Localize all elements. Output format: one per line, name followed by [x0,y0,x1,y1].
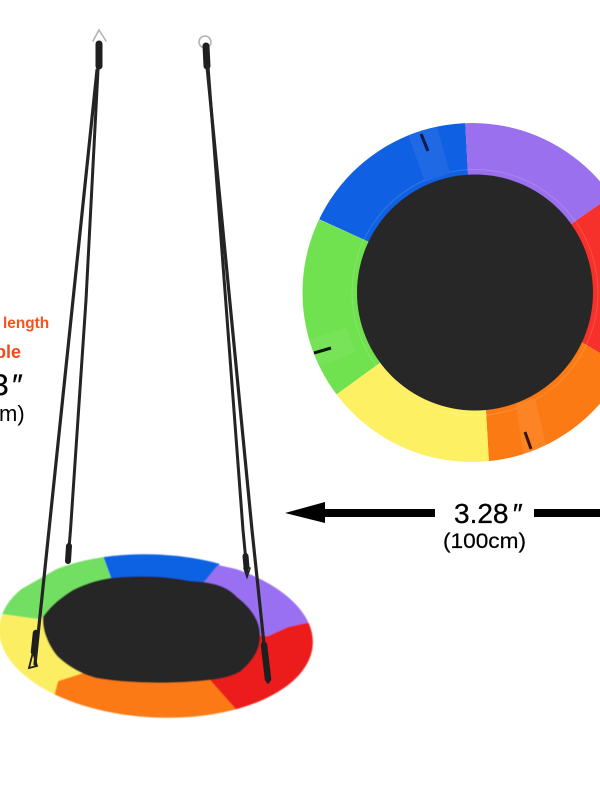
seat centre: black mesh [43,576,260,683]
top segment: purple [465,123,600,224]
left inner rope [68,70,98,560]
seat segment: red [210,622,314,710]
seat segment: blue [103,553,220,583]
right inner rope [208,66,247,572]
left outer buckle [34,633,36,652]
rope length label, cropped at page edge [0,315,49,426]
left inner buckle [68,546,69,561]
width dimension arrow [285,498,600,553]
left hook ring [93,30,106,41]
orange strap slit [525,432,531,449]
top segment: red [571,204,600,353]
top segment: blue [319,123,468,242]
right outer rope [207,66,268,682]
seat segment: purple [204,564,309,637]
width in inches: 3.28″ [454,498,522,529]
blue strap slit [421,134,428,151]
width in centimetres: (100cm) [443,530,526,553]
orange label line one: length [3,315,49,332]
top segment: green [302,220,380,394]
arrow head [285,502,325,523]
top segment: orange [486,342,600,462]
swing seat, side view [0,553,314,719]
left loop [29,652,37,668]
right inner loop [244,568,250,577]
hanging ropes [29,30,268,682]
arrow shaft right [534,509,600,517]
green strap slit [314,348,331,353]
left strap [96,44,102,66]
seam stitching [352,170,598,416]
swing seat, top view [302,123,600,462]
top centre: black mesh [357,174,593,410]
right outer buckle [264,645,268,679]
seat segment: yellow [0,614,83,694]
right inner buckle [246,556,247,567]
seat segment: orange [54,672,236,719]
seat segment: green [2,556,112,620]
top segment: yellow [336,362,489,462]
green strap patch [308,328,356,367]
right hook ring [199,36,211,48]
arrow shaft left [323,509,435,517]
right strap [206,46,207,66]
left outer rope [35,70,97,664]
blue strap patch [408,127,450,182]
orange strap patch [516,398,546,454]
